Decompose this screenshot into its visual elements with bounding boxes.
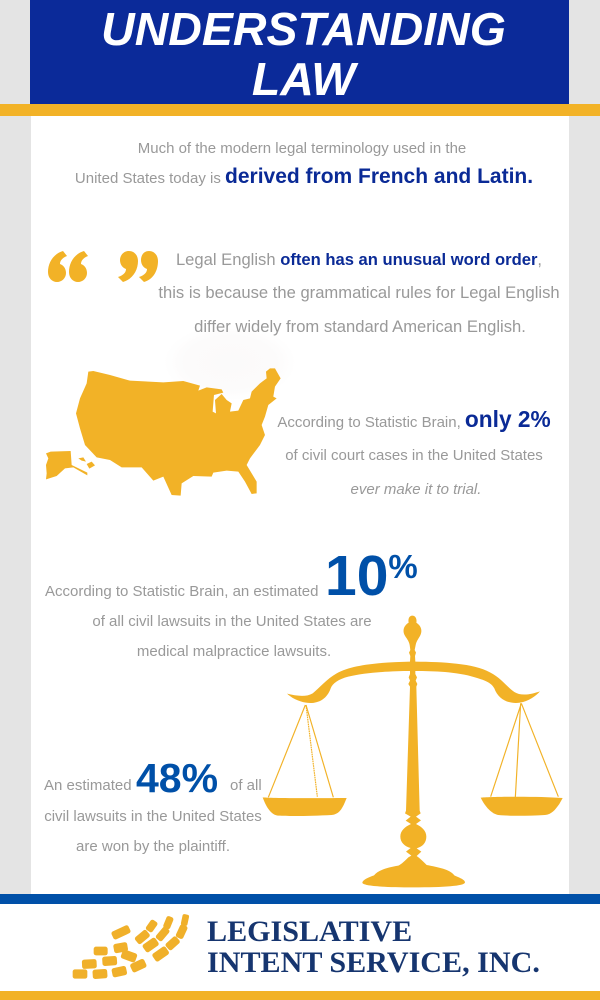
statistic: 48%: An estimated (44, 777, 132, 794)
quote text: Legal English often has an unusual word order, (176, 250, 542, 269)
statistic: 48%: of all (230, 777, 262, 794)
title banner: LAW (252, 53, 355, 105)
logo: gold bricks (72, 914, 190, 979)
footer blue bar (0, 894, 600, 904)
quote text: differ widely from standard American English. (194, 317, 526, 336)
title banner (30, 0, 569, 104)
statistic: 10% (45, 544, 418, 660)
title banner: UNDERSTANDING (101, 3, 506, 55)
quote text: this is because the grammatical rules for Legal English (158, 283, 560, 302)
statistic: 10%: medical malpractice lawsuits. (137, 643, 331, 660)
gold header bar (0, 104, 600, 116)
gold footer bar (0, 991, 600, 1000)
statistic: 48%: civil lawsuits in the United States (44, 808, 262, 825)
icon: quotation marks (48, 251, 158, 282)
statistic: 10%: According to Statistic Brain, an estimated (45, 583, 318, 600)
logo wordmark (207, 914, 540, 979)
statistic: only 2%: ever make it to trial. (351, 481, 481, 498)
intro text: United States today is derived from French and Latin. (75, 165, 533, 188)
faint smudge behind map (165, 325, 295, 400)
statistic: only 2%: According to Statistic Brain, only 2% (277, 406, 551, 432)
statistic: 48% (44, 755, 262, 855)
white content panel (31, 116, 569, 894)
logo wordmark: LEGISLATIVE (207, 914, 412, 948)
quote text (158, 250, 560, 336)
statistic: 10%: of all civil lawsuits in the United States are (92, 613, 372, 630)
statistic: 48%: are won by the plaintiff. (76, 838, 230, 855)
logo wordmark: INTENT SERVICE, INC. (207, 945, 540, 979)
statistic: 10%: 10% (325, 544, 418, 608)
map: United States (46, 368, 281, 496)
statistic: only 2%: of civil court cases in the United States (285, 447, 543, 464)
icon: scales of justice (262, 616, 563, 888)
statistic: only 2% (277, 406, 551, 498)
intro text (75, 140, 533, 188)
intro text: Much of the modern legal terminology used in the (138, 140, 466, 157)
footer panel (0, 904, 600, 991)
statistic: 48%: 48% (136, 755, 218, 801)
